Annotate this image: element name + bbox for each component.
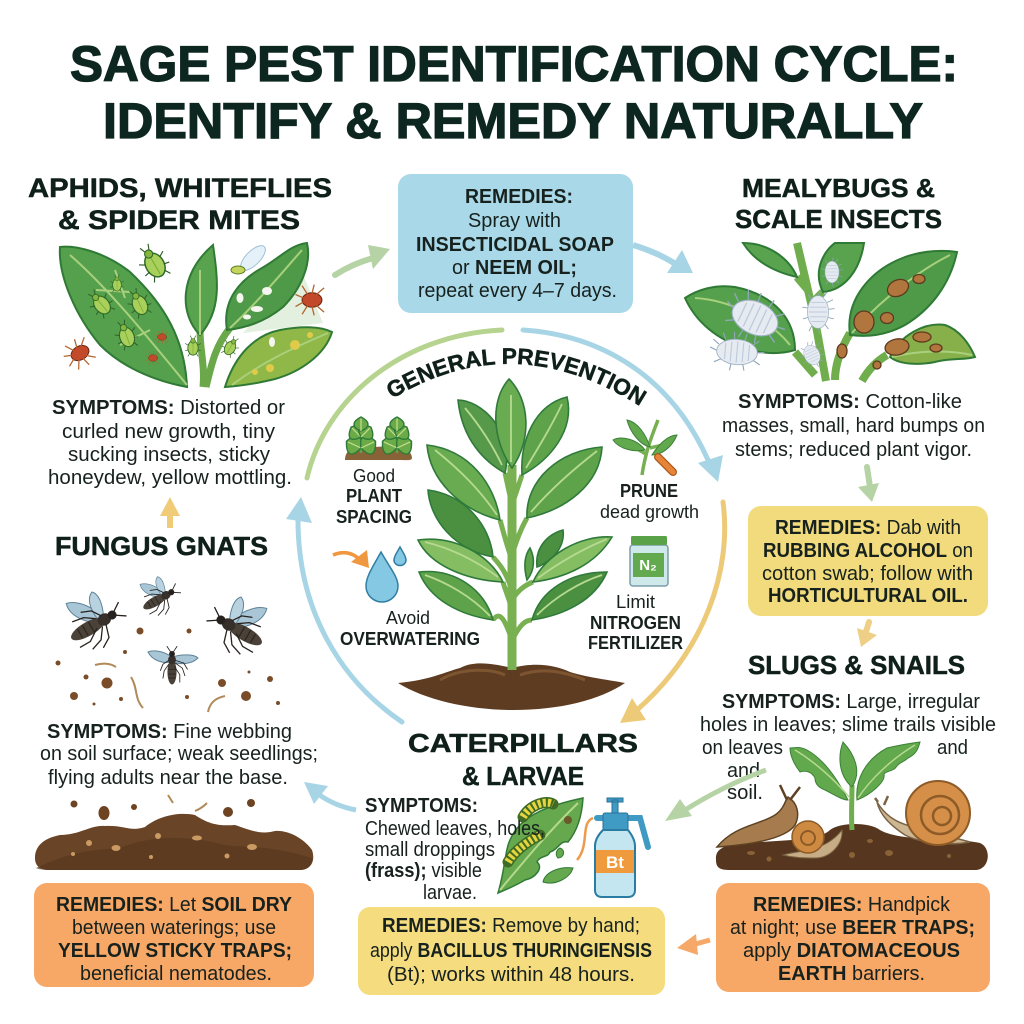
illustration: aphid infested sage (59, 239, 332, 387)
heading: general prevention: GENERAL PREVENTION (387, 348, 648, 406)
panel: remedies slugs: apply DIATOMACEOUS (743, 940, 960, 962)
panel: remedies mealybugs: cotton swab; follow with (762, 563, 973, 585)
heading: caterpillars: CATERPILLARS (408, 728, 638, 758)
panel: remedies caterpillars (358, 907, 665, 995)
arrow: aphids to remedies (335, 245, 390, 275)
illustration: mealybug infested sage (685, 243, 975, 381)
panel: remedies slugs: EARTH barriers. (778, 963, 925, 985)
heading: aphids (28, 173, 332, 235)
heading: caterpillars (408, 728, 638, 791)
symptoms: aphids: honeydew, yellow mottling. (48, 467, 292, 489)
central cycle ring (286, 330, 725, 723)
heading: fungus gnats: FUNGUS GNATS (55, 531, 268, 561)
illustration: soil mound (35, 795, 313, 870)
prevention: overwatering: Avoid (386, 607, 430, 628)
symptoms: caterpillars: larvae. (423, 882, 477, 904)
heading: slugs: SLUGS & SNAILS (748, 650, 965, 680)
arrow: caterpillars to gnats (304, 782, 356, 810)
prevention: prune: dead growth (600, 501, 699, 522)
symptoms: fungus gnats: flying adults near the base. (48, 767, 288, 789)
panel: remedies aphids: Spray with (468, 210, 561, 232)
symptoms: fungus gnats: on soil surface; weak seedlings; (40, 743, 318, 765)
symptoms: caterpillars: small droppings (365, 839, 495, 861)
symptoms: aphids: SYMPTOMS: Distorted or (52, 397, 285, 419)
illustration: Bt spray bottle (577, 798, 648, 897)
panel: remedies caterpillars: REMEDIES: Remove by hand; (382, 915, 640, 937)
panel: remedies slugs (716, 883, 990, 992)
heading: mealybugs: MEALYBUGS & (742, 173, 935, 203)
prevention: nitrogen: Limit (616, 591, 655, 612)
symptoms: fungus gnats: SYMPTOMS: Fine webbing (47, 721, 292, 743)
panel: remedies fungus gnats (34, 883, 314, 987)
panel: remedies mealybugs: REMEDIES: Dab with (775, 517, 961, 539)
symptoms: caterpillars (365, 795, 545, 904)
prevention: prune: PRUNE (620, 480, 678, 501)
illustration: central sage plant (398, 379, 625, 710)
symptoms: slugs: and (727, 760, 760, 782)
symptoms: slugs: SYMPTOMS: Large, irregular (722, 691, 980, 713)
prevention: nitrogen: FERTILIZER (588, 632, 683, 653)
symptoms: slugs: soil. (727, 782, 763, 804)
heading: aphids: & SPIDER MITES (58, 205, 300, 235)
title: IDENTIFY & REMEDY NATURALLY (103, 93, 923, 149)
prevention: overwatering: OVERWATERING (340, 628, 480, 649)
prevention: prune (600, 420, 699, 522)
heading: caterpillars: & LARVAE (462, 761, 584, 791)
panel: remedies fungus gnats: REMEDIES: Let SOIL DRY (56, 894, 293, 916)
panel: remedies mealybugs (748, 506, 988, 616)
prevention: overwatering (333, 547, 480, 649)
prevention: plant spacing: SPACING (336, 506, 412, 527)
panel: remedies aphids: or NEEM OIL; (452, 257, 577, 279)
arrow: slug remedies to caterpillar remedies (677, 934, 710, 955)
panel: remedies mealybugs: HORTICULTURAL OIL. (768, 585, 968, 607)
panel: remedies aphids: repeat every 4–7 days. (418, 280, 617, 302)
title: SAGE PEST IDENTIFICATION CYCLE: (70, 36, 958, 92)
panel: remedies slugs: at night; use BEER TRAPS; (730, 917, 975, 939)
symptoms: aphids (48, 397, 292, 489)
symptoms: mealybugs (722, 391, 985, 461)
panel: remedies fungus gnats: beneficial nematodes. (80, 963, 272, 985)
arrow: remedies to slugs (857, 622, 877, 647)
panel: remedies fungus gnats: YELLOW STICKY TRAPS; (58, 940, 292, 962)
title (70, 36, 958, 149)
arrow: slugs to caterpillars (665, 770, 766, 821)
symptoms: aphids: sucking insects, sticky (68, 444, 270, 466)
symptoms: aphids: curled new growth, tiny (62, 421, 275, 443)
arrow: symptoms to mealybug remedies (858, 467, 879, 502)
prevention: plant spacing: PLANT (346, 485, 403, 506)
illustration: chewed leaf and caterpillar (498, 798, 583, 893)
illustration: slugs and snails (716, 742, 988, 870)
heading: mealybugs: SCALE INSECTS (735, 204, 942, 234)
panel: remedies aphids: INSECTICIDAL SOAP (416, 234, 614, 256)
prevention: nitrogen: NITROGEN (590, 612, 681, 633)
symptoms: caterpillars: Chewed leaves, holes, (365, 818, 545, 840)
symptoms: mealybugs: SYMPTOMS: Cotton-like (738, 391, 962, 413)
panel: remedies aphids: REMEDIES: (465, 186, 573, 208)
prevention: plant spacing: Good (353, 465, 395, 486)
symptoms: slugs (700, 691, 996, 804)
panel: remedies slugs: REMEDIES: Handpick (753, 894, 951, 916)
prevention: nitrogen: N₂ (639, 557, 657, 574)
symptoms: slugs: holes in leaves; slime trails visible (700, 714, 996, 736)
panel: remedies caterpillars: (Bt); works within 48 hours. (387, 964, 635, 986)
symptoms: fungus gnats (40, 721, 318, 789)
panel: remedies fungus gnats: between waterings; use (72, 917, 276, 939)
illustration: Bt spray bottle: Bt (606, 853, 624, 872)
symptoms: caterpillars: SYMPTOMS: (365, 795, 478, 817)
symptoms: slugs: and (937, 737, 968, 759)
illustration: fungus gnats (55, 569, 280, 712)
arrow: gnats to aphids (160, 497, 180, 528)
symptoms: mealybugs: masses, small, hard bumps on (722, 415, 985, 437)
symptoms: slugs: on leaves (702, 737, 783, 759)
heading: aphids: APHIDS, WHITEFLIES (28, 173, 332, 203)
symptoms: caterpillars: (frass); visible (365, 860, 482, 882)
prevention: plant spacing (336, 417, 416, 527)
panel: remedies aphids (398, 174, 633, 313)
symptoms: mealybugs: stems; reduced plant vigor. (735, 439, 972, 461)
panel: remedies mealybugs: RUBBING ALCOHOL on (763, 540, 973, 562)
panel: remedies caterpillars: apply BACILLUS THURINGIENSIS (370, 940, 652, 962)
prevention: nitrogen (588, 536, 683, 653)
heading: mealybugs (735, 173, 942, 234)
arrow: remedies to mealybugs (633, 245, 693, 273)
